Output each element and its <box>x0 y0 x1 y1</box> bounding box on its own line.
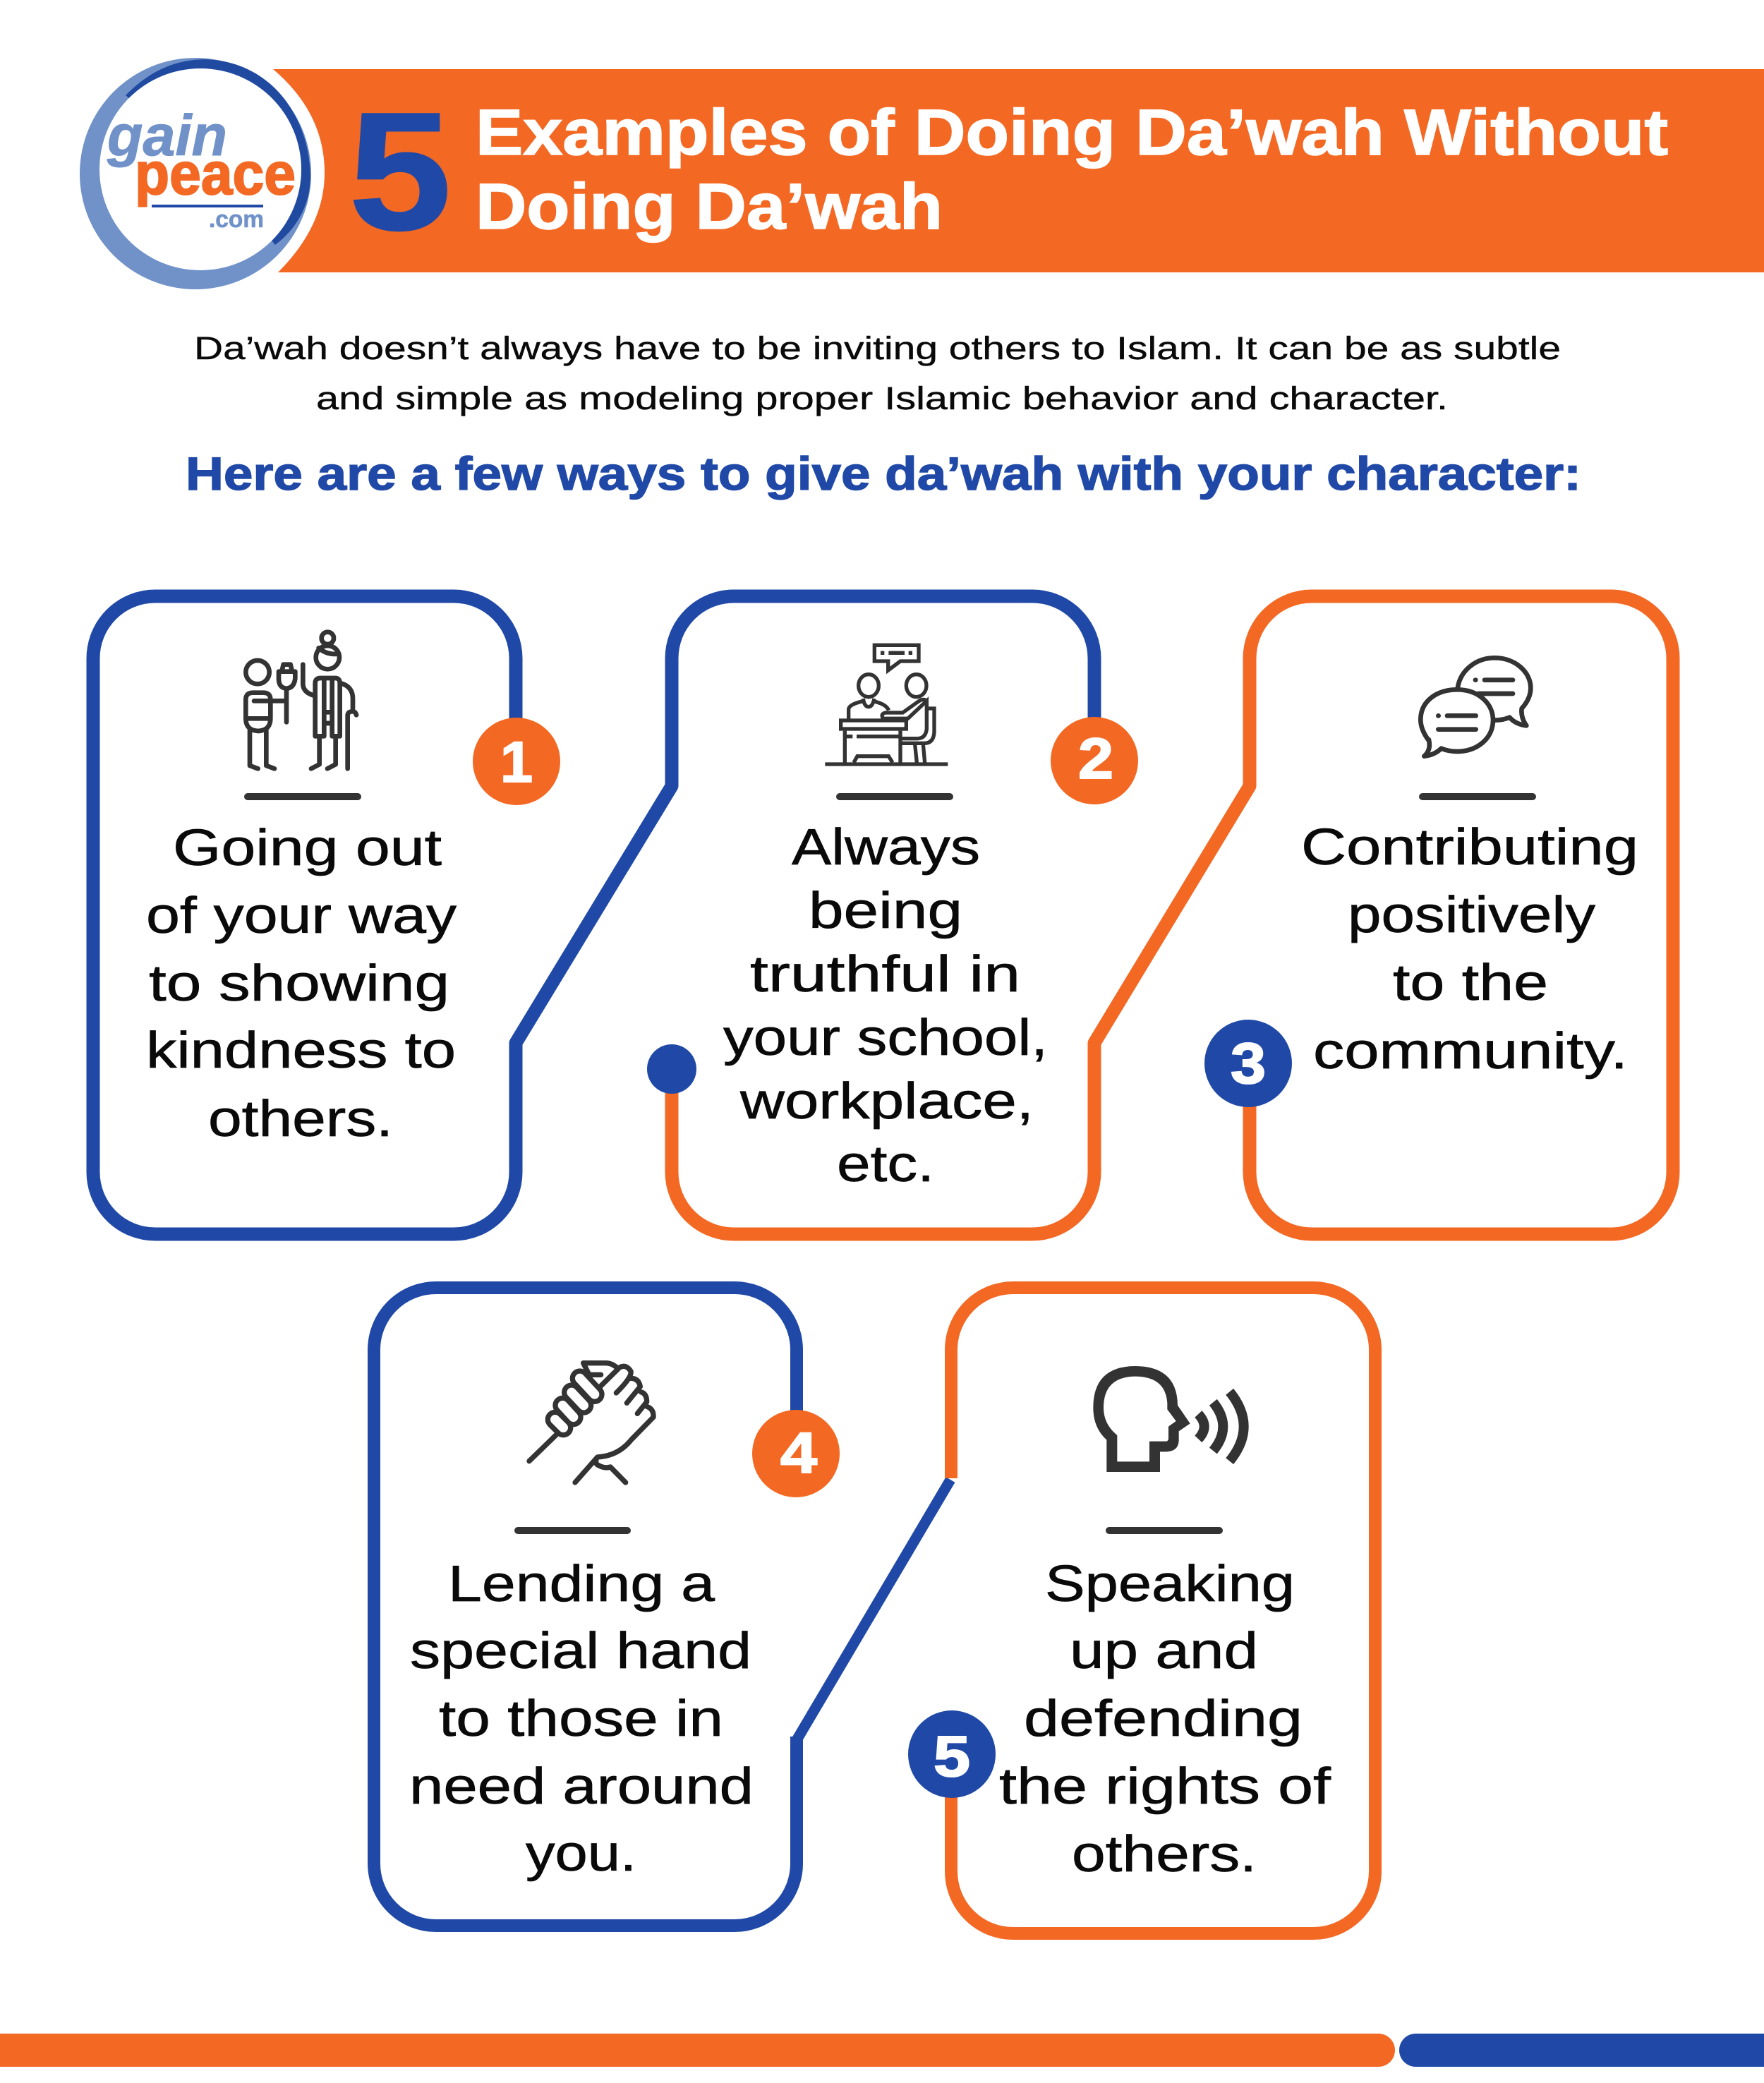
badge 5: 5 <box>934 1725 970 1789</box>
header banner <box>80 58 1764 289</box>
badge 5 <box>908 1710 996 1798</box>
text: card 1: Going out <box>173 820 442 876</box>
divider <box>836 793 953 800</box>
divider <box>244 793 361 800</box>
text: card 2: being <box>809 883 962 939</box>
connector dot on card 2 <box>647 1044 696 1094</box>
text: card 1: of your way <box>146 888 457 944</box>
text: card 1: to showing <box>149 955 449 1012</box>
text: card 3: positively <box>1348 887 1595 943</box>
connector outline: blue, card 4 <box>374 1288 950 1926</box>
panel: card 5 speaking up <box>908 1281 1382 1940</box>
big number 5: 5 <box>349 78 452 265</box>
text: card 4: special hand <box>410 1623 751 1679</box>
badge 3 <box>1204 1020 1292 1107</box>
badge 1: 1 <box>500 730 533 795</box>
title: Examples of Doing Da’wah Without <box>476 97 1668 169</box>
banner background <box>273 69 1764 272</box>
title <box>476 97 1668 243</box>
icon: clasped hands <box>529 1363 653 1483</box>
icon: two people at a desk with speech bubble <box>825 645 948 764</box>
intro paragraph <box>194 330 1561 416</box>
panel: card 3 community <box>1204 589 1679 1240</box>
text: card 2: truthful in <box>750 946 1020 1003</box>
text: card 3 <box>1301 819 1638 1080</box>
badge 4: 4 <box>780 1421 817 1485</box>
icon: two people, helper and elder <box>246 632 356 768</box>
text: card 5: others. <box>1072 1826 1257 1883</box>
text: card 3: Contributing <box>1301 819 1638 876</box>
text: card 1 <box>146 820 457 1147</box>
logo: gainpeace.com <box>80 58 311 289</box>
logo: gainpeace.com: peace <box>135 140 296 207</box>
text: card 2: etc. <box>837 1136 934 1193</box>
subheading: Here are a few ways to give da’wah with your character: <box>186 447 1581 500</box>
title: Doing Da’wah <box>476 171 943 243</box>
text: card 1: kindness to <box>146 1022 456 1079</box>
panel: card 2 truthful <box>665 589 1138 1240</box>
text: card 5: defending <box>1024 1691 1303 1747</box>
footer bar: orange <box>0 2034 1395 2067</box>
text: card 4: Lending a <box>448 1556 715 1612</box>
intro paragraph: and simple as modeling proper Islamic behavior and character. <box>316 380 1448 416</box>
divider <box>514 1527 631 1534</box>
badge 3: 3 <box>1231 1032 1266 1096</box>
text: card 4: need around <box>409 1758 754 1815</box>
icon: speaking head with sound waves <box>1093 1366 1244 1472</box>
text: card 5 <box>999 1556 1331 1883</box>
text: card 1: others. <box>208 1091 393 1147</box>
connector outline: orange, card 5 <box>951 1288 1375 1933</box>
text: card 5: up and <box>1070 1623 1258 1679</box>
connector outline: blue, cards 1 and 2 <box>93 596 1094 1234</box>
text: card 3: community. <box>1313 1023 1628 1080</box>
text: card 2: workplace, <box>739 1073 1034 1130</box>
text: card 2: your school, <box>723 1010 1048 1066</box>
divider <box>1419 793 1536 800</box>
panel: card 1 kindness <box>87 589 560 1240</box>
logo: gainpeace.com: gain <box>107 104 227 168</box>
panel: card 4 helping hand <box>368 1281 840 1932</box>
badge 2 <box>1051 717 1138 804</box>
text: card 5: the rights of <box>999 1758 1331 1815</box>
connector outline: orange, cards 2 and 3 <box>672 596 1673 1234</box>
text: card 2: Always <box>792 819 980 876</box>
divider <box>1106 1527 1223 1534</box>
icon: chat bubbles <box>1420 658 1530 756</box>
text: card 3: to the <box>1393 955 1548 1011</box>
badge 4 <box>752 1410 840 1497</box>
text: card 4 <box>409 1556 754 1882</box>
text: card 4: to those in <box>439 1691 723 1747</box>
footer bar: blue <box>1399 2034 1764 2067</box>
text: card 2 <box>723 819 1048 1193</box>
text: card 4: you. <box>526 1825 636 1882</box>
text: card 5: Speaking <box>1045 1556 1295 1612</box>
intro paragraph: Da’wah doesn’t always have to be inviting others to Islam. It can be as subtle <box>194 330 1561 366</box>
logo: gainpeace.com: .com <box>209 206 264 233</box>
badge 1 <box>473 718 560 805</box>
badge 2: 2 <box>1078 727 1113 791</box>
